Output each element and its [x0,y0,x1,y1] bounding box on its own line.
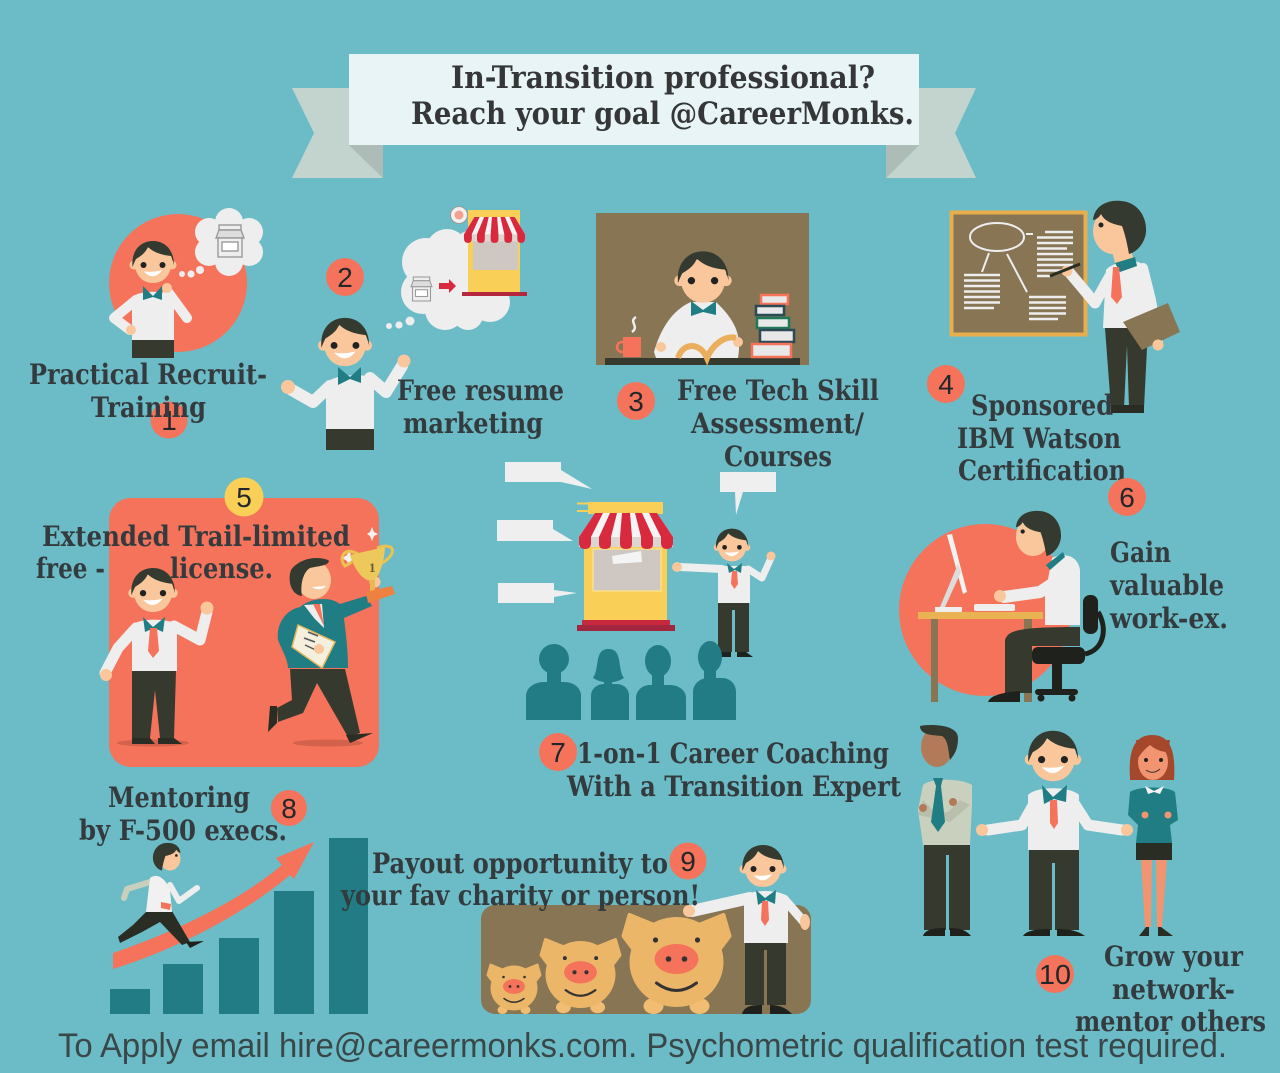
panel: step 10 grow your network [918,725,1266,1038]
coral circle [109,214,247,352]
label: career coaching [566,737,901,803]
title text: Reach your goal @CareerMonks. [411,96,914,132]
label: free tech skill assessment: Free Tech Skill [677,374,879,407]
presenting man [1050,201,1180,413]
label: grow your network-mentor others: Grow your [1104,940,1244,973]
label: sponsored IBM Watson certification: Certification [958,454,1126,487]
coral rounded panel [109,498,379,767]
step badge 7: 7 [550,737,566,768]
woman with crossed arms [1128,735,1178,936]
shop [462,210,527,296]
thought bubble with shop [386,229,513,330]
brown backdrop [596,213,809,365]
title text: In-Transition professional? [451,60,875,96]
label: grow your network-mentor others: network- [1112,973,1235,1006]
step badge 7 [539,733,577,771]
panel: step 9 payout opportunity [340,842,811,1014]
seated man [988,511,1080,702]
thinking man [114,241,187,358]
panel: step 2 resume marketing [281,206,564,450]
label: gain valuable work-ex [1109,536,1228,635]
step badge 4: 4 [938,369,954,400]
desk and computer [918,534,1043,702]
label: extended trail-limited free license: Extended Trail-limited [42,520,350,553]
running man [118,843,204,948]
reading man [654,251,743,358]
banner ribbon left [292,88,383,178]
step badge 1: 1 [161,405,177,436]
label: sponsored IBM Watson certification: Sponsored [971,389,1113,422]
office chair [1032,595,1103,702]
label: extended trail-limited free license: license. [170,552,273,585]
thumbs-up man [100,568,214,746]
label: free tech skill assessment: Assessment/ [690,407,865,440]
banner panel [349,54,919,145]
step badge 2 [326,258,364,296]
footer call to action: To Apply email hire@careermonks.com. Psychometric qualification test required. [58,1027,1227,1065]
presenting man [672,529,776,657]
star sparkles [342,527,378,566]
seal icon [450,206,468,224]
man with open arms [976,731,1133,936]
panel: step 3 tech skill assessment [596,213,879,473]
step badge 10: 10 [1039,959,1071,990]
welcoming man [281,318,410,450]
step badge 6: 6 [1119,482,1135,513]
label: practical recruit-training: Practical Recruit- [29,358,267,391]
label: grow your network-mentor others [1075,940,1266,1038]
label: payout opportunity: your fav charity or person! [340,879,700,912]
label: gain valuable work-ex: valuable [1109,569,1224,602]
growth arrow [113,842,314,969]
growth bar chart [110,838,368,1014]
label: mentoring by F-500 execs [79,781,287,847]
label: free resume marketing: Free resume [397,374,564,407]
title banner [292,54,976,178]
speech bubbles [497,462,776,603]
desk [605,358,800,365]
coffee mug [617,317,641,357]
step badge 3: 3 [628,386,644,417]
label: payout opportunity [340,847,700,912]
label: free tech skill assessment [677,374,879,473]
label: free tech skill assessment: Courses [724,440,832,473]
label: career coaching: 1-on-1 Career Coaching [577,737,889,770]
coral circle [899,524,1071,696]
panel: step 6 work experience [899,478,1228,702]
step badge 1 [150,402,188,438]
step badge 3 [617,382,655,420]
piggy banks [488,915,730,1014]
label: mentoring by F-500 execs: by F-500 execs. [79,814,287,847]
step badge 9 [670,842,706,880]
label: practical recruit-training: Training [91,391,206,424]
label: extended trail-limited free license [36,520,350,585]
audience silhouettes [526,641,736,720]
label: gain valuable work-ex: work-ex. [1109,602,1228,635]
label: sponsored IBM Watson certification [957,389,1126,487]
panel: step 7 career coaching [497,462,901,803]
book stack [752,295,794,357]
running man with trophy [268,558,380,746]
man with crossed arms [918,725,972,936]
step badge 8: 8 [281,793,297,824]
step badge 6 [1108,478,1146,516]
banner ribbon right [886,88,976,178]
label: extended trail-limited free license: free - [36,552,105,585]
step badge 2: 2 [337,262,353,293]
label: mentoring by F-500 execs: Mentoring [108,781,250,814]
step badge 8 [271,790,307,826]
pointing man [683,845,810,1014]
label: career coaching: With a Transition Expert [566,770,901,803]
label: practical recruit-training [29,358,267,424]
panel: step 1 practical training [29,208,267,438]
step badge 9: 9 [680,846,696,877]
chalkboard [952,212,1086,334]
panel: step 8 mentoring [79,781,368,1014]
step badge 5: 5 [236,482,252,513]
step badge 5 [224,478,264,516]
thought bubble with shop icon [179,208,263,278]
trophy: 1 [369,560,376,575]
shop [577,502,675,631]
label: sponsored IBM Watson certification: IBM Watson [957,422,1121,455]
label: free resume marketing [397,374,564,440]
label: payout opportunity: Payout opportunity to [372,847,668,880]
trophy [342,546,395,603]
label: gain valuable work-ex: Gain [1110,536,1171,569]
brown rounded backdrop [481,905,811,1014]
panel: step 4 IBM Watson certification [927,201,1180,487]
title text [411,60,914,132]
step badge 10 [1036,955,1074,993]
panel: step 5 extended trial license [36,478,395,767]
step badge 4 [927,365,965,403]
label: free resume marketing: marketing [403,407,543,440]
